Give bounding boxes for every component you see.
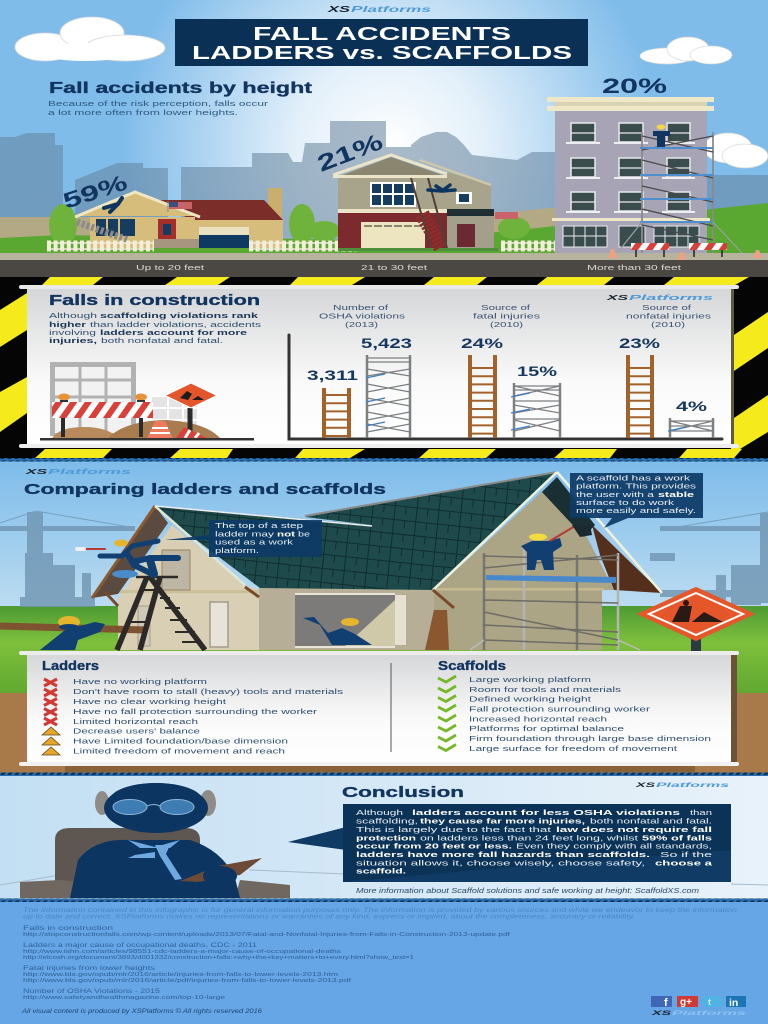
scaffold platform bbox=[486, 575, 616, 583]
panel: comparison bbox=[19, 651, 739, 772]
label: 21%: 21% bbox=[313, 128, 386, 177]
callout: step ladder: used as a work bbox=[215, 538, 293, 546]
callout: scaffold: the user with a bbox=[576, 490, 655, 499]
worker: in window bbox=[303, 617, 372, 645]
list text: ladders: Limited horizontal reach bbox=[73, 717, 198, 726]
section: fall accidents by height bbox=[0, 0, 768, 278]
conclusion box: Although bbox=[356, 808, 403, 817]
paragraph bbox=[49, 311, 261, 345]
ladder: two storey bbox=[411, 178, 447, 248]
logo: XS bbox=[634, 782, 656, 789]
list text: scaffolds: Platforms for optimal balance bbox=[469, 724, 624, 733]
heading: conclusion: Conclusion bbox=[342, 784, 464, 801]
heading: falls in construction: Falls in construction bbox=[49, 293, 260, 309]
callout: step ladder: be bbox=[298, 530, 310, 538]
disclaimer: up to date and correct, XSPlatforms makes no representations or warranties of any kind, express or implied, about the completeness, accuracy or reliability. bbox=[23, 914, 635, 920]
conclusion box: on ladders less than 24 feet long, whilst bbox=[420, 834, 638, 842]
references: http://www.bls.gov/opub/mlr/2016/article/pdf/injuries-from-falls-to-lower-levels-2013.pdf bbox=[23, 978, 352, 984]
speech tail bbox=[288, 827, 346, 850]
logo bbox=[24, 467, 131, 476]
chart: column titles: Number of bbox=[333, 303, 389, 312]
chart: column titles: (2010) bbox=[490, 320, 524, 329]
paragraph: higher bbox=[49, 320, 86, 329]
logo bbox=[326, 4, 432, 14]
road labels bbox=[136, 263, 682, 272]
chart: axes bbox=[289, 335, 722, 439]
dividers bbox=[0, 458, 768, 902]
references: http://www.bls.gov/opub/mlr/2016/article/injuries-from-falls-to-lower-levels-2013.htm bbox=[23, 972, 338, 978]
callout: step ladder: The top of a step bbox=[215, 521, 303, 530]
conclusion box: than bbox=[690, 808, 712, 817]
panel bbox=[19, 285, 739, 448]
house bbox=[92, 472, 662, 650]
chart: ladder 3,311 bbox=[324, 388, 349, 438]
cloud: top left bbox=[15, 17, 165, 61]
paragraph: ladders account for more bbox=[100, 328, 247, 337]
chart: column titles: Source of bbox=[481, 303, 531, 312]
list text: ladders bbox=[73, 677, 343, 756]
crane: right bbox=[650, 512, 768, 605]
chart: column titles: (2010) bbox=[651, 320, 686, 329]
list: scaffolds bbox=[438, 659, 711, 753]
conclusion box: Even they comply with all standards, bbox=[516, 842, 712, 850]
step ladder bbox=[117, 577, 205, 650]
worker: carrying plank bbox=[40, 616, 105, 650]
disclaimer: The information contained in this infographic is for general information purposes only. The information is provided by various sources and while we endeavor to keep the information bbox=[23, 907, 738, 914]
paragraph: than ladder violations, accidents bbox=[90, 320, 261, 329]
section: footer bbox=[0, 902, 768, 1024]
fences bbox=[47, 243, 555, 249]
scaffold: house bbox=[470, 546, 640, 650]
paragraph: involving bbox=[49, 328, 96, 337]
section: comparing ladders and scaffolds bbox=[0, 458, 768, 774]
list text: ladders: Don't have room to stall (heavy) tools and materials bbox=[73, 687, 343, 696]
heading: comparing: Comparing ladders and scaffolds bbox=[24, 482, 386, 498]
conclusion box: both nonfatal and fatal. bbox=[590, 816, 712, 826]
label: 20%: 20% bbox=[602, 75, 668, 98]
illustration: construction site bbox=[40, 362, 254, 440]
chart: values: 15% bbox=[517, 363, 558, 379]
road labels: Up to 20 feet bbox=[136, 263, 205, 272]
social icons: f bbox=[664, 997, 668, 1009]
title: LADDERS vs. SCAFFOLDS bbox=[192, 42, 572, 63]
conclusion box: ladders have more fall hazards than scaffolds. bbox=[356, 850, 650, 859]
title bbox=[175, 19, 588, 66]
callout: scaffold bbox=[570, 473, 703, 528]
crane: left bbox=[0, 511, 135, 607]
list text: scaffolds bbox=[469, 675, 711, 753]
intro text: Because of the risk perception, falls occur bbox=[48, 99, 269, 108]
chart: column titles: OSHA violations bbox=[319, 312, 405, 320]
building bbox=[547, 97, 714, 253]
chart: scaffold 4% bbox=[668, 418, 713, 438]
chart: values: 23% bbox=[619, 335, 661, 351]
road bbox=[0, 253, 768, 260]
conclusion box: choose a bbox=[655, 858, 714, 868]
social icons: t bbox=[708, 997, 711, 1007]
cloud: behind building bbox=[704, 133, 768, 168]
list text: scaffolds: Firm foundation through large base dimension bbox=[469, 734, 711, 743]
callout: scaffold: platform. This provides bbox=[576, 482, 696, 490]
list: ladders: Ladders bbox=[42, 659, 99, 673]
references: http://elcosh.org/document/3893/d001332/construction+falls:+why+the+key+matters+to+every.html?show_text=1 bbox=[23, 955, 414, 961]
character: manager in chair bbox=[20, 783, 290, 898]
references bbox=[23, 925, 511, 1001]
list text: scaffolds: Room for tools and materials bbox=[469, 685, 621, 694]
list text: ladders: Have no fall protection surrounding the worker bbox=[73, 707, 318, 716]
list: ladders bbox=[42, 659, 343, 756]
conclusion box: 59% of falls bbox=[642, 834, 712, 842]
conclusion box: So if the bbox=[660, 850, 712, 859]
callout: step ladder bbox=[165, 520, 322, 557]
callout: step ladder: not bbox=[277, 530, 296, 538]
paragraph: injuries, bbox=[49, 336, 97, 345]
hazard stripes bbox=[0, 277, 768, 458]
house: ranch bbox=[75, 188, 283, 248]
chart: values: 5,423 bbox=[361, 335, 412, 351]
references: http://www.ishn.com/articles/98551-cdc-ladders-a-major-cause-of-occupational-deaths bbox=[23, 949, 342, 955]
references: Number of OSHA Violations - 2015 bbox=[23, 988, 161, 995]
skyline bbox=[0, 121, 768, 240]
conclusion box: situation allows it, choose wisely, choose safety, bbox=[356, 858, 645, 868]
list text: scaffolds: Large working platform bbox=[469, 675, 591, 684]
title: FALL ACCIDENTS bbox=[253, 23, 511, 44]
list text: ladders: Limited freedom of movement and reach bbox=[73, 746, 285, 756]
conclusion box: This is largely due to the fact that bbox=[356, 825, 551, 834]
scaffold: building bbox=[618, 132, 742, 253]
section: falls in construction bbox=[0, 277, 768, 458]
flag: ranch bbox=[168, 201, 192, 212]
references: Ladders a major cause of occupational deaths, CDC - 2011 bbox=[23, 942, 258, 949]
trees bbox=[49, 204, 530, 246]
chart: column titles: Source of bbox=[642, 303, 692, 312]
list text: scaffolds: Large surface for freedom of movement bbox=[469, 744, 678, 753]
references: Fatal injuries from lower heights bbox=[23, 965, 155, 972]
chart: column titles: nonfatal injuries bbox=[626, 312, 711, 320]
logo bbox=[634, 782, 730, 789]
conclusion box: protection bbox=[356, 834, 417, 842]
list text: ladders: Have no clear working height bbox=[73, 697, 227, 706]
heading: fall accidents by height: Fall accidents by height bbox=[49, 80, 312, 97]
conclusion box: scaffolding, bbox=[356, 816, 418, 826]
cloud: top right bbox=[640, 37, 732, 64]
conclusion box: law does not require fall bbox=[556, 825, 712, 834]
social icons bbox=[651, 996, 746, 1009]
conclusion box: occur from 20 feet or less. bbox=[356, 842, 512, 850]
paragraph: Although bbox=[49, 311, 97, 320]
barriers bbox=[631, 243, 727, 257]
chart: scaffold 15% bbox=[511, 383, 560, 438]
road labels: 21 to 30 feet bbox=[361, 263, 428, 272]
logo: XS bbox=[326, 4, 351, 14]
logo: XS bbox=[24, 467, 47, 476]
social icons: g+ bbox=[680, 997, 692, 1008]
logo: Platforms bbox=[48, 467, 131, 476]
paragraph: both nonfatal and fatal. bbox=[101, 336, 223, 345]
conclusion box bbox=[343, 804, 731, 882]
road labels: More than 30 feet bbox=[587, 263, 682, 272]
worker: scaffold bbox=[653, 124, 670, 147]
falling worker: ranch bbox=[104, 198, 122, 212]
references: Falls in construction bbox=[23, 925, 114, 932]
list: scaffolds: Scaffolds bbox=[438, 659, 506, 673]
list text: scaffolds: Fall protection surrounding worker bbox=[469, 704, 651, 714]
chart: ladder 24% bbox=[470, 355, 495, 438]
logo bbox=[605, 293, 713, 302]
cones bbox=[608, 249, 762, 260]
road sign bbox=[639, 588, 753, 652]
references: http://stopconstructionfalls.com/wp-content/uploads/2013/07/Fatal-and-Nonfatal-Injuries-from-Falls-in-Construction-2013-update.pdf bbox=[23, 932, 511, 938]
references: http://www.safetyandhealthmagazine.com/top-10-large bbox=[23, 995, 225, 1001]
callout: scaffold: A scaffold has a work bbox=[576, 474, 690, 482]
conclusion box: ladders account for less OSHA violations bbox=[412, 808, 680, 817]
intro text: a lot more often from lower heights. bbox=[48, 108, 238, 117]
logo: Platforms bbox=[672, 1010, 746, 1017]
chart: ladder 23% bbox=[628, 355, 652, 438]
list text: ladders: Have no working platform bbox=[73, 677, 207, 686]
fallen ladder bbox=[77, 222, 128, 240]
paragraph: scaffolding violations rank bbox=[100, 311, 259, 320]
conclusion box: scaffold. bbox=[356, 866, 406, 876]
list text: scaffolds: Increased horizontal reach bbox=[469, 714, 607, 724]
plank bbox=[0, 626, 147, 630]
logo: XS bbox=[650, 1010, 672, 1017]
callout: scaffold: stable bbox=[658, 490, 694, 499]
more information line: More information about Scaffold solutions and safe working at height: ScaffoldXS.com bbox=[356, 886, 699, 895]
logo: XS bbox=[605, 293, 628, 302]
list text: ladders: Have Limited foundation/base dimension bbox=[73, 736, 288, 746]
flag: two storey bbox=[495, 212, 518, 219]
list text: ladders: Decrease users' balance bbox=[73, 726, 200, 736]
conclusion box: they cause far more injuries, bbox=[420, 816, 585, 826]
logo bbox=[650, 1010, 746, 1017]
icons: warning triangles bbox=[42, 727, 60, 755]
falling worker: two storey bbox=[428, 185, 455, 191]
ground bbox=[0, 207, 768, 240]
callout: scaffold: more easily and safely. bbox=[576, 506, 696, 515]
worker: on scaffold bbox=[521, 525, 592, 570]
section: conclusion bbox=[0, 776, 768, 899]
list text: scaffolds: Defined working height bbox=[469, 694, 592, 704]
callout: scaffold: surface to do work bbox=[576, 498, 674, 507]
house: two storey bbox=[333, 155, 498, 251]
logo: Platforms bbox=[351, 4, 432, 14]
callout: step ladder: ladder may bbox=[215, 530, 274, 538]
logo: Platforms bbox=[629, 293, 713, 302]
label: 59%: 59% bbox=[60, 170, 130, 214]
chart: column titles: (2013) bbox=[345, 320, 379, 329]
disclaimer bbox=[23, 907, 738, 920]
icons: green checks bbox=[438, 676, 456, 750]
social icons: in bbox=[729, 997, 738, 1009]
callout: step ladder: platform. bbox=[215, 546, 259, 555]
chart: values: 3,311 bbox=[307, 367, 358, 383]
chart: values: 24% bbox=[461, 335, 504, 351]
intro text bbox=[48, 99, 269, 117]
chart: values bbox=[307, 335, 708, 414]
chart: scaffold 5,423 bbox=[366, 355, 410, 438]
copyright: All visual content is produced by XSPlatforms © All rights reserved 2016 bbox=[21, 1007, 263, 1015]
worker: on step ladder bbox=[77, 540, 178, 578]
chart: values: 4% bbox=[676, 398, 708, 414]
chart: column titles: fatal injuries bbox=[473, 312, 540, 320]
logo: Platforms bbox=[656, 782, 730, 789]
icons: red crosses bbox=[44, 679, 57, 725]
chart: column titles bbox=[319, 303, 711, 329]
